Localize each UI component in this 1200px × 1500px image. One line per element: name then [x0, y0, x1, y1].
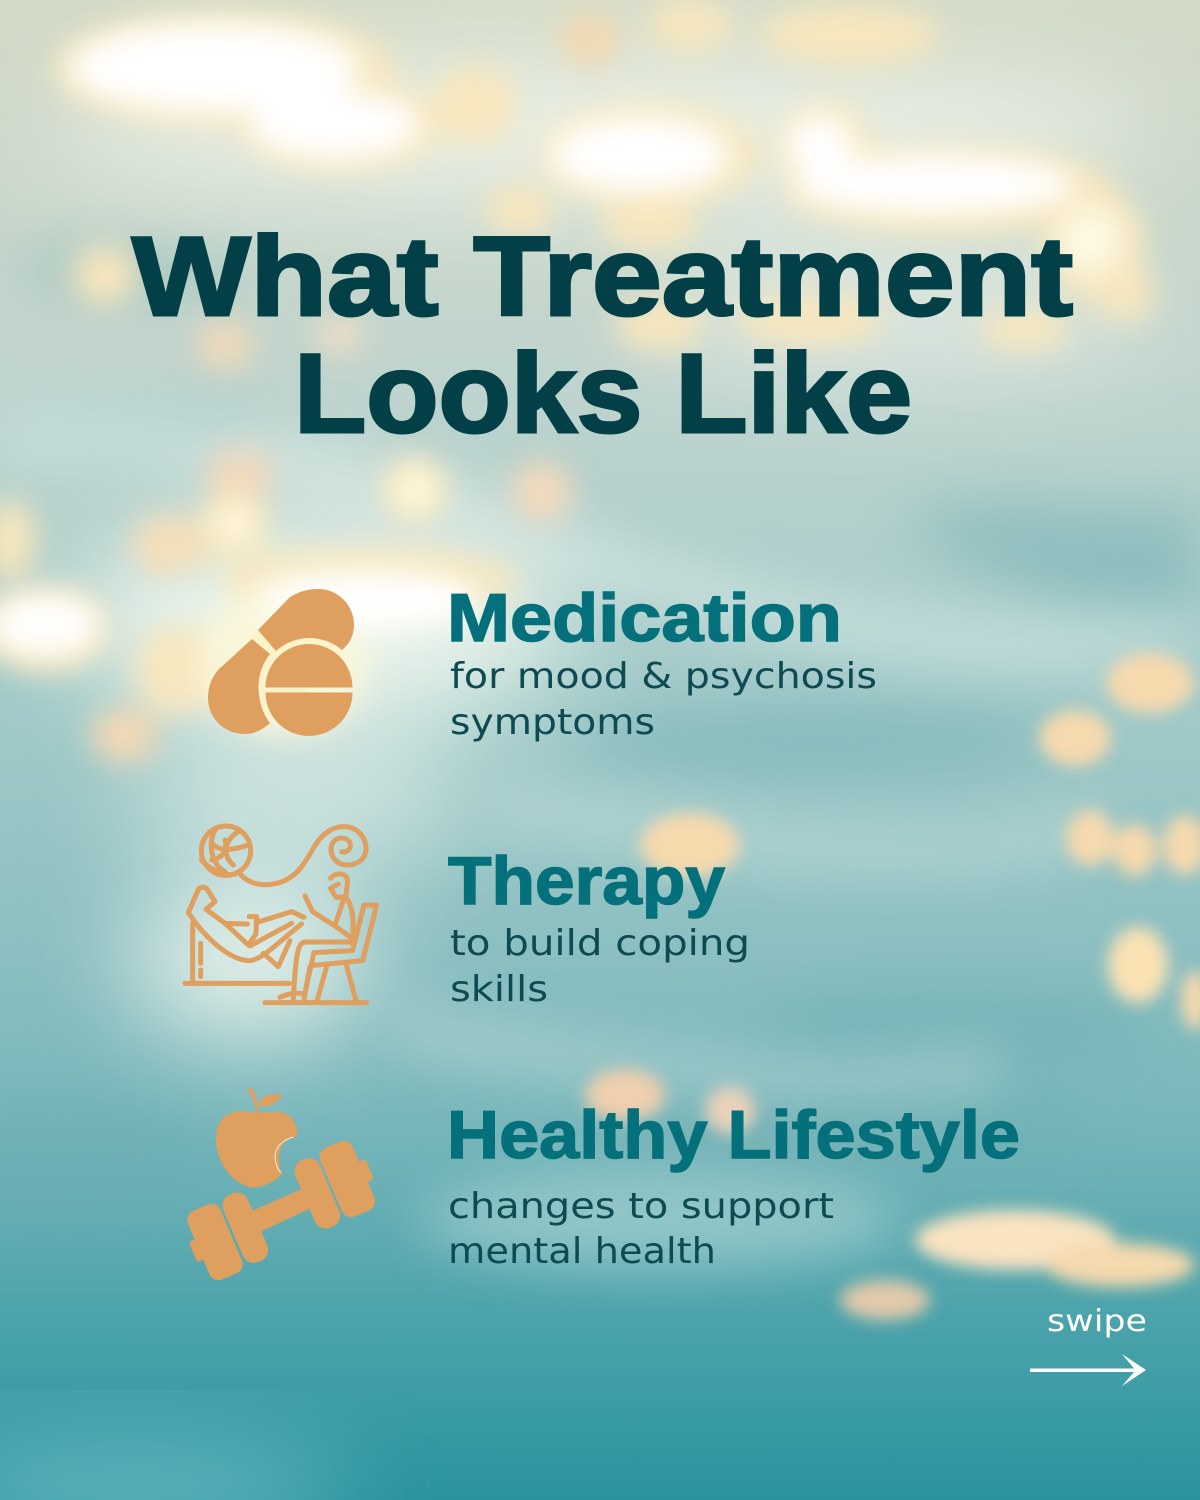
description: medication: symptoms [450, 702, 655, 743]
icon: medication pills [208, 589, 354, 736]
swipe label: swipe [1047, 1304, 1147, 1339]
heading: healthy lifestyle: Healthy Lifestyle [447, 1097, 1020, 1173]
heading: medication: Medication [447, 580, 842, 656]
description: medication [450, 656, 877, 743]
description: healthy lifestyle: mental health [448, 1231, 716, 1272]
white cores [0, 23, 1122, 655]
peach rims [0, 0, 1155, 763]
description: therapy: skills [450, 969, 548, 1010]
description: therapy [450, 923, 750, 1010]
title: What Treatment [132, 214, 1073, 339]
heading: therapy: Therapy [448, 843, 725, 919]
panel: medication text [447, 580, 877, 743]
description: healthy lifestyle: changes to support [448, 1186, 834, 1227]
title: Looks Like [294, 331, 912, 456]
description: medication: for mood & psychosis [450, 656, 877, 697]
description: healthy lifestyle [448, 1186, 834, 1272]
panel: healthy lifestyle text [447, 1097, 1020, 1272]
description: therapy: to build coping [450, 923, 750, 964]
icon: apple and dumbbell [184, 1088, 378, 1283]
icon: therapy session [185, 826, 377, 1003]
title [132, 214, 1073, 456]
arrow: swipe [1030, 1354, 1146, 1386]
panel: therapy text [448, 843, 750, 1010]
